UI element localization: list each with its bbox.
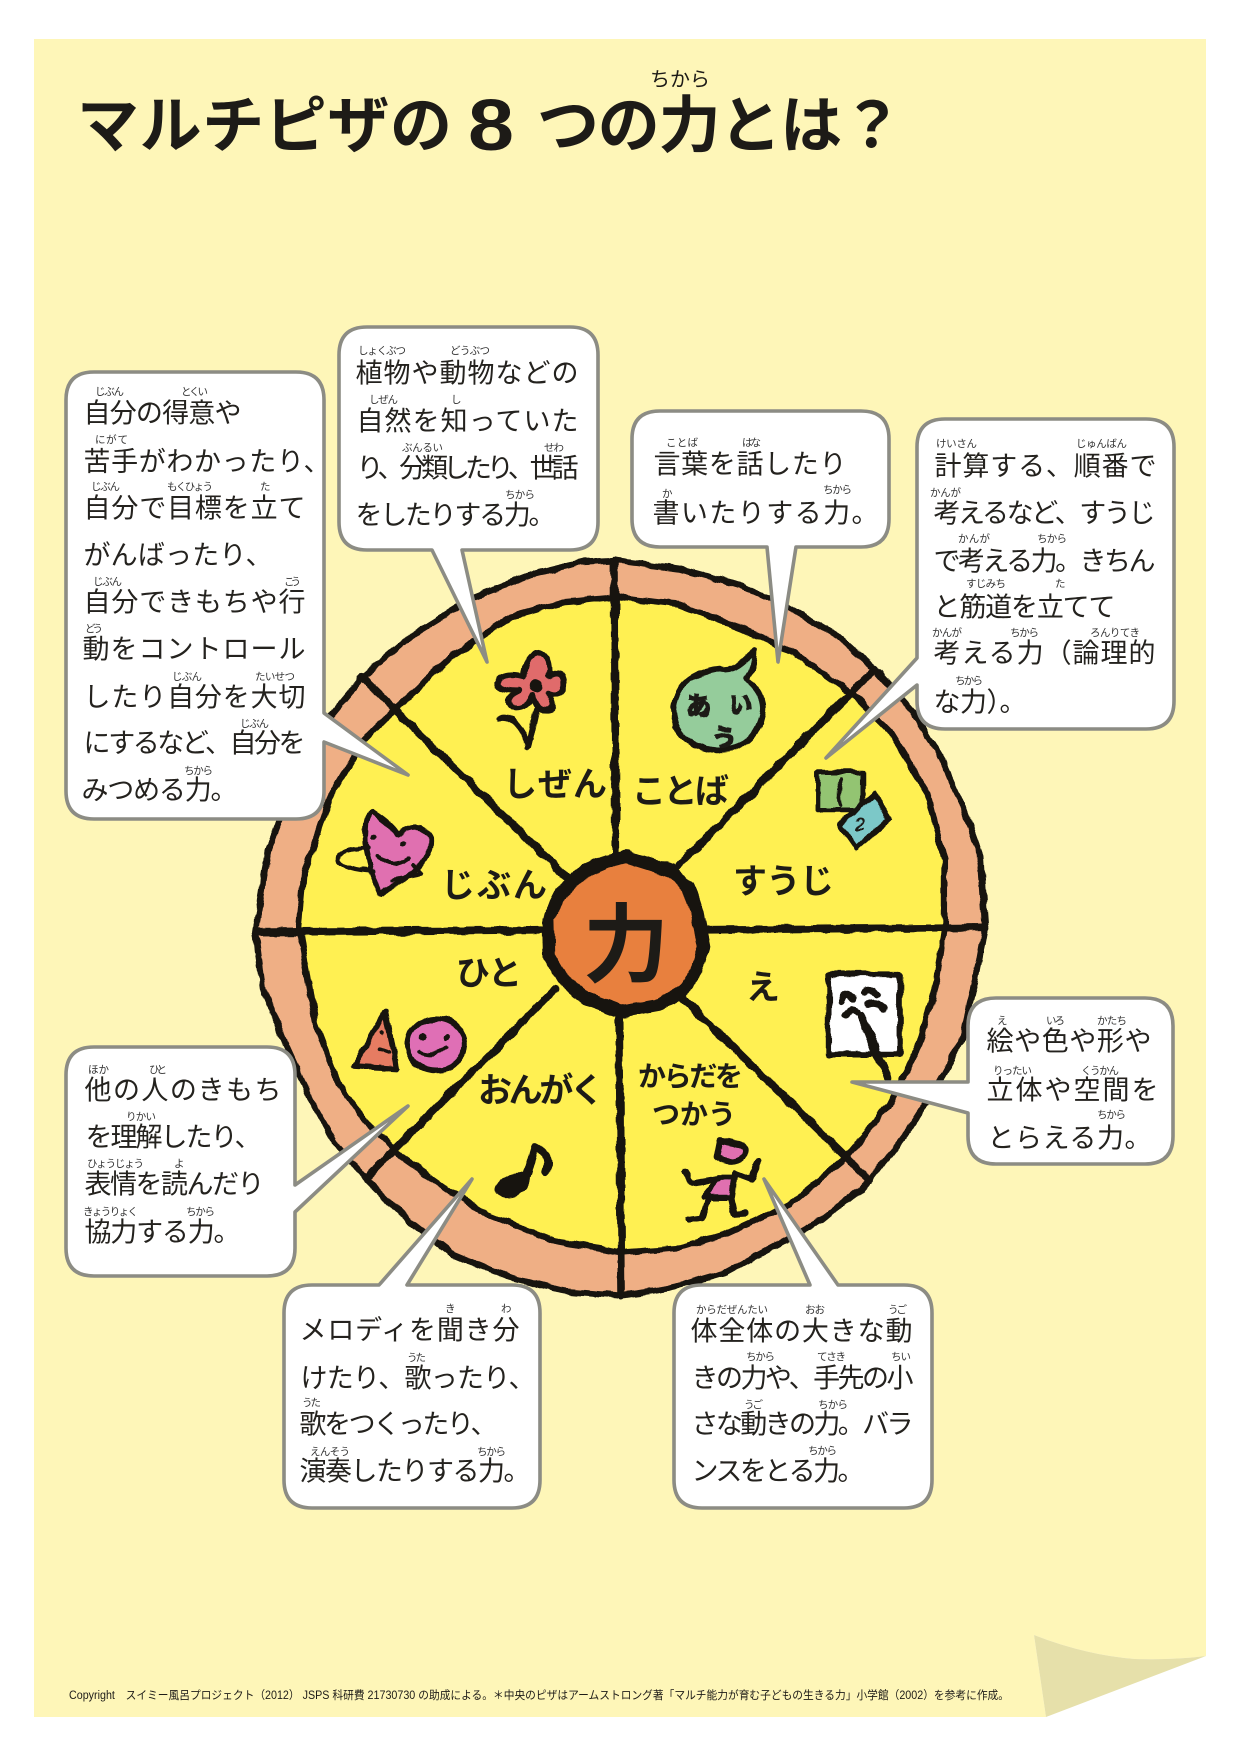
- furigana: じぶん: とくい: [181, 386, 208, 398]
- callout text: ことば: 言葉を話したり: [654, 450, 846, 480]
- callout text: ひと: を理解したり、: [86, 1122, 262, 1152]
- callout text: しぜん: [356, 358, 578, 530]
- furigana: しぜん: しょくぶつ: [358, 345, 406, 357]
- callout text: からだをつかう: [690, 1316, 914, 1486]
- slice dividers: [258, 560, 985, 1296]
- callout text: え: とらえる力。: [988, 1124, 1152, 1154]
- title: ちから: [650, 69, 710, 91]
- furigana: じぶん: じぶん: [240, 718, 269, 730]
- furigana: すうじ: [930, 438, 1140, 687]
- slice labels: ことば: [632, 773, 729, 811]
- furigana: すうじ: た: [1055, 578, 1066, 590]
- furigana: え: かたち: [1097, 1015, 1127, 1027]
- callout text: じぶん: 自分の得意や: [84, 398, 242, 428]
- furigana: しぜん: どうぶつ: [450, 345, 490, 357]
- callout: ことば: [632, 411, 889, 662]
- furigana: ひと: ひと: [149, 1064, 167, 1076]
- furigana: じぶん: じぶん: [172, 671, 202, 683]
- slice labels: え: [746, 969, 780, 1007]
- callout text: すうじ: [934, 452, 1156, 718]
- slice labels: つかう: [652, 1099, 736, 1130]
- callout text: おんがく: けたり、歌ったり、: [300, 1364, 536, 1394]
- furigana: からだをつかう: ちから: [808, 1445, 837, 1457]
- callout: え: [852, 998, 1173, 1164]
- icon: flower: [497, 652, 564, 748]
- footer credit: Copyright スイミー風呂プロジェクト（2012） JSPS 科研費 21730730 の助成による。＊中央のピザはアームストロング著「マルチ能力が育む子どもの生きる力」小学館（2002）を参考に作成。: [69, 1688, 1009, 1702]
- furigana: しぜん: ちから: [505, 489, 535, 501]
- furigana: しぜん: ぶんるい: [402, 442, 443, 454]
- furigana: おんがく: うた: [302, 1397, 321, 1409]
- icon: speech bubble: い: [729, 692, 751, 717]
- title: 8: [468, 86, 514, 166]
- callout text: すうじ: 計算する、順番で: [934, 452, 1156, 482]
- icon: picture and brush: [829, 974, 900, 1078]
- icon: speech bubble: あ: [686, 693, 711, 721]
- furigana: しぜん: しぜん: [369, 394, 398, 406]
- callout text: おんがく: メロディを聞き分: [300, 1316, 520, 1346]
- furigana: おんがく: [302, 1303, 512, 1458]
- furigana: からだをつかう: からだぜんたい: [696, 1304, 768, 1316]
- callout text: からだをつかう: ンスをとる力。: [692, 1456, 864, 1486]
- callout text: すうじ: 考えるなど、すうじ: [934, 498, 1156, 528]
- callout text: じぶん: にするなど、自分を: [84, 728, 306, 758]
- callout: すうじ: [826, 419, 1174, 758]
- callout text: じぶん: [82, 398, 330, 806]
- icon: number cards: [818, 772, 888, 848]
- callout text: じぶん: 動をコントロール: [82, 634, 306, 664]
- icon: triangle and round faces: [354, 1011, 465, 1071]
- callout text: じぶん: みつめる力。: [82, 776, 238, 806]
- furigana: からだをつかう: てさき: [817, 1351, 846, 1363]
- slice labels: からだを: [638, 1061, 743, 1092]
- slice labels: ひと: [456, 955, 522, 993]
- slice labels: [441, 766, 834, 1130]
- furigana: ひと: [83, 1064, 215, 1218]
- furigana: すうじ: すじみち: [966, 578, 1006, 590]
- furigana: じぶん: もくひょう: [167, 481, 213, 493]
- callout text: ことば: 書いたりする力。: [652, 498, 878, 528]
- furigana: すうじ: けいさん: [936, 438, 977, 450]
- callout: じぶん: [66, 372, 408, 819]
- furigana: え: りったい: [993, 1065, 1032, 1077]
- furigana: え: いろ: [1046, 1015, 1065, 1027]
- furigana: すうじ: じゅんばん: [1076, 438, 1127, 450]
- callout text: しぜん: り、分類したり、世話: [356, 454, 578, 484]
- slice labels: すうじ: [733, 863, 834, 901]
- furigana: しぜん: [358, 345, 564, 501]
- furigana: からだをつかう: ちい: [891, 1351, 911, 1363]
- callout text: じぶん: 自分できもちや行: [84, 588, 306, 618]
- furigana: おんがく: うた: [407, 1352, 426, 1364]
- furigana: ことば: はな: [742, 437, 761, 449]
- callout text: じぶん: 自分で目標を立て: [84, 494, 306, 524]
- callout text: ひと: 他の人のきもち: [84, 1076, 282, 1106]
- callout text: ひと: [84, 1076, 282, 1248]
- furigana: ことば: ちから: [823, 484, 852, 496]
- furigana: すうじ: ちから: [1010, 627, 1039, 639]
- callout: しぜん: [339, 327, 598, 662]
- furigana: おんがく: えんそう: [310, 1446, 350, 1458]
- callout: からだをつかう: [674, 1179, 932, 1508]
- slice labels: しぜん: [503, 766, 607, 804]
- furigana: ひと: きょうりょく: [83, 1206, 138, 1218]
- furigana: からだをつかう: うご: [744, 1398, 764, 1411]
- callout text: おんがく: 演奏したりする力。: [300, 1456, 530, 1486]
- slice labels: じぶん: [441, 867, 547, 905]
- furigana: からだをつかう: うご: [888, 1303, 908, 1316]
- callout text: からだをつかう: さな動きの力。バラ: [692, 1410, 914, 1440]
- furigana: からだをつかう: ちから: [818, 1399, 848, 1411]
- furigana: ことば: か: [662, 488, 673, 500]
- callout text: おんがく: [300, 1316, 536, 1486]
- callout text: ひと: 表情を読んだり: [84, 1170, 264, 1200]
- furigana: ひと: ひょうじょう: [87, 1158, 144, 1170]
- icon: speech bubble: う: [712, 726, 736, 753]
- icon: moving person: [685, 1140, 759, 1220]
- callout text: しぜん: 植物や動物などの: [356, 358, 578, 388]
- furigana: ひと: よ: [174, 1158, 184, 1170]
- furigana: じぶん: こう: [284, 576, 301, 588]
- furigana: じぶん: ちから: [184, 765, 213, 777]
- title: [77, 69, 903, 166]
- furigana: ことば: ことば: [666, 437, 698, 449]
- callout text: じぶん: がんばったり、: [84, 540, 272, 570]
- callout: おんがく: [284, 1179, 540, 1508]
- title: つの力とは？: [537, 92, 903, 161]
- callout text: すうじ: 考える力（論理的: [934, 638, 1156, 668]
- furigana: すうじ: かんが: [958, 532, 990, 545]
- furigana: ことば: [662, 437, 852, 500]
- callout text: からだをつかう: 体全体の大きな動: [690, 1316, 912, 1346]
- furigana: ひと: りかい: [126, 1111, 156, 1123]
- callout text: ことば: [652, 450, 878, 528]
- callout text: すうじ: な力）。: [934, 688, 1026, 718]
- furigana: じぶん: にがて: [95, 433, 128, 446]
- icon: number cards: 2: [855, 813, 865, 833]
- furigana: え: え: [997, 1015, 1008, 1027]
- furigana: からだをつかう: [696, 1303, 911, 1457]
- furigana: じぶん: [85, 386, 301, 777]
- furigana: すうじ: ちから: [1037, 533, 1067, 545]
- furigana: え: ちから: [1097, 1109, 1126, 1121]
- furigana: すうじ: かんが: [930, 486, 962, 499]
- callout text: え: 絵や色や形や: [986, 1026, 1152, 1056]
- furigana: じぶん: た: [260, 481, 270, 493]
- pizza diagram: [256, 560, 985, 1296]
- callout text: しぜん: 自然を知っていた: [356, 406, 578, 436]
- center kanji: 力: [583, 898, 669, 994]
- furigana: おんがく: わ: [501, 1303, 512, 1315]
- callout text: すうじ: で考える力。きちん: [934, 546, 1156, 576]
- callout: ひと: [66, 1047, 408, 1276]
- furigana: じぶん: たいせつ: [255, 671, 295, 683]
- furigana: え: [993, 1015, 1127, 1121]
- furigana: すうじ: ろんりてき: [1090, 627, 1140, 639]
- callout text: おんがく: 歌をつくったり、: [300, 1410, 498, 1440]
- icon: music note: [492, 1146, 548, 1202]
- callout text: じぶん: したり自分を大切: [84, 682, 306, 712]
- title: マルチピザの: [77, 92, 452, 161]
- furigana: すうじ: かんが: [932, 626, 962, 639]
- furigana: しぜん: し: [451, 394, 462, 406]
- furigana: ひと: ちから: [186, 1206, 215, 1218]
- icon: heart: [338, 813, 430, 894]
- furigana: じぶん: どう: [85, 623, 103, 635]
- furigana: え: くうかん: [1081, 1065, 1119, 1077]
- furigana: ひと: ほか: [88, 1064, 110, 1076]
- furigana: しぜん: せわ: [544, 442, 564, 454]
- callout text: からだをつかう: きの力や、手先の小: [692, 1364, 914, 1394]
- icon: speech bubble: [673, 649, 763, 753]
- center hub: [548, 857, 704, 1012]
- callout text: ひと: 協力する力。: [84, 1218, 240, 1248]
- furigana: からだをつかう: おお: [805, 1304, 825, 1316]
- pizza yellow surface: [299, 597, 944, 1253]
- furigana: からだをつかう: ちから: [746, 1351, 775, 1363]
- furigana: じぶん: じぶん: [95, 386, 124, 398]
- slice labels: おんがく: [478, 1071, 604, 1110]
- callout text: しぜん: をしたりする力。: [356, 500, 556, 530]
- furigana: じぶん: じぶん: [93, 576, 122, 588]
- furigana: おんがく: ちから: [477, 1446, 506, 1458]
- furigana: すうじ: ちから: [955, 675, 983, 687]
- furigana: おんがく: き: [445, 1303, 456, 1315]
- pizza crust: [256, 560, 985, 1296]
- callout text: え: [986, 1026, 1158, 1154]
- furigana: じぶん: じぶん: [91, 481, 120, 493]
- callout text: え: 立体や空間を: [986, 1076, 1158, 1106]
- callout text: すうじ: と筋道を立てて: [934, 592, 1116, 622]
- callout text: じぶん: 苦手がわかったり、: [84, 447, 330, 477]
